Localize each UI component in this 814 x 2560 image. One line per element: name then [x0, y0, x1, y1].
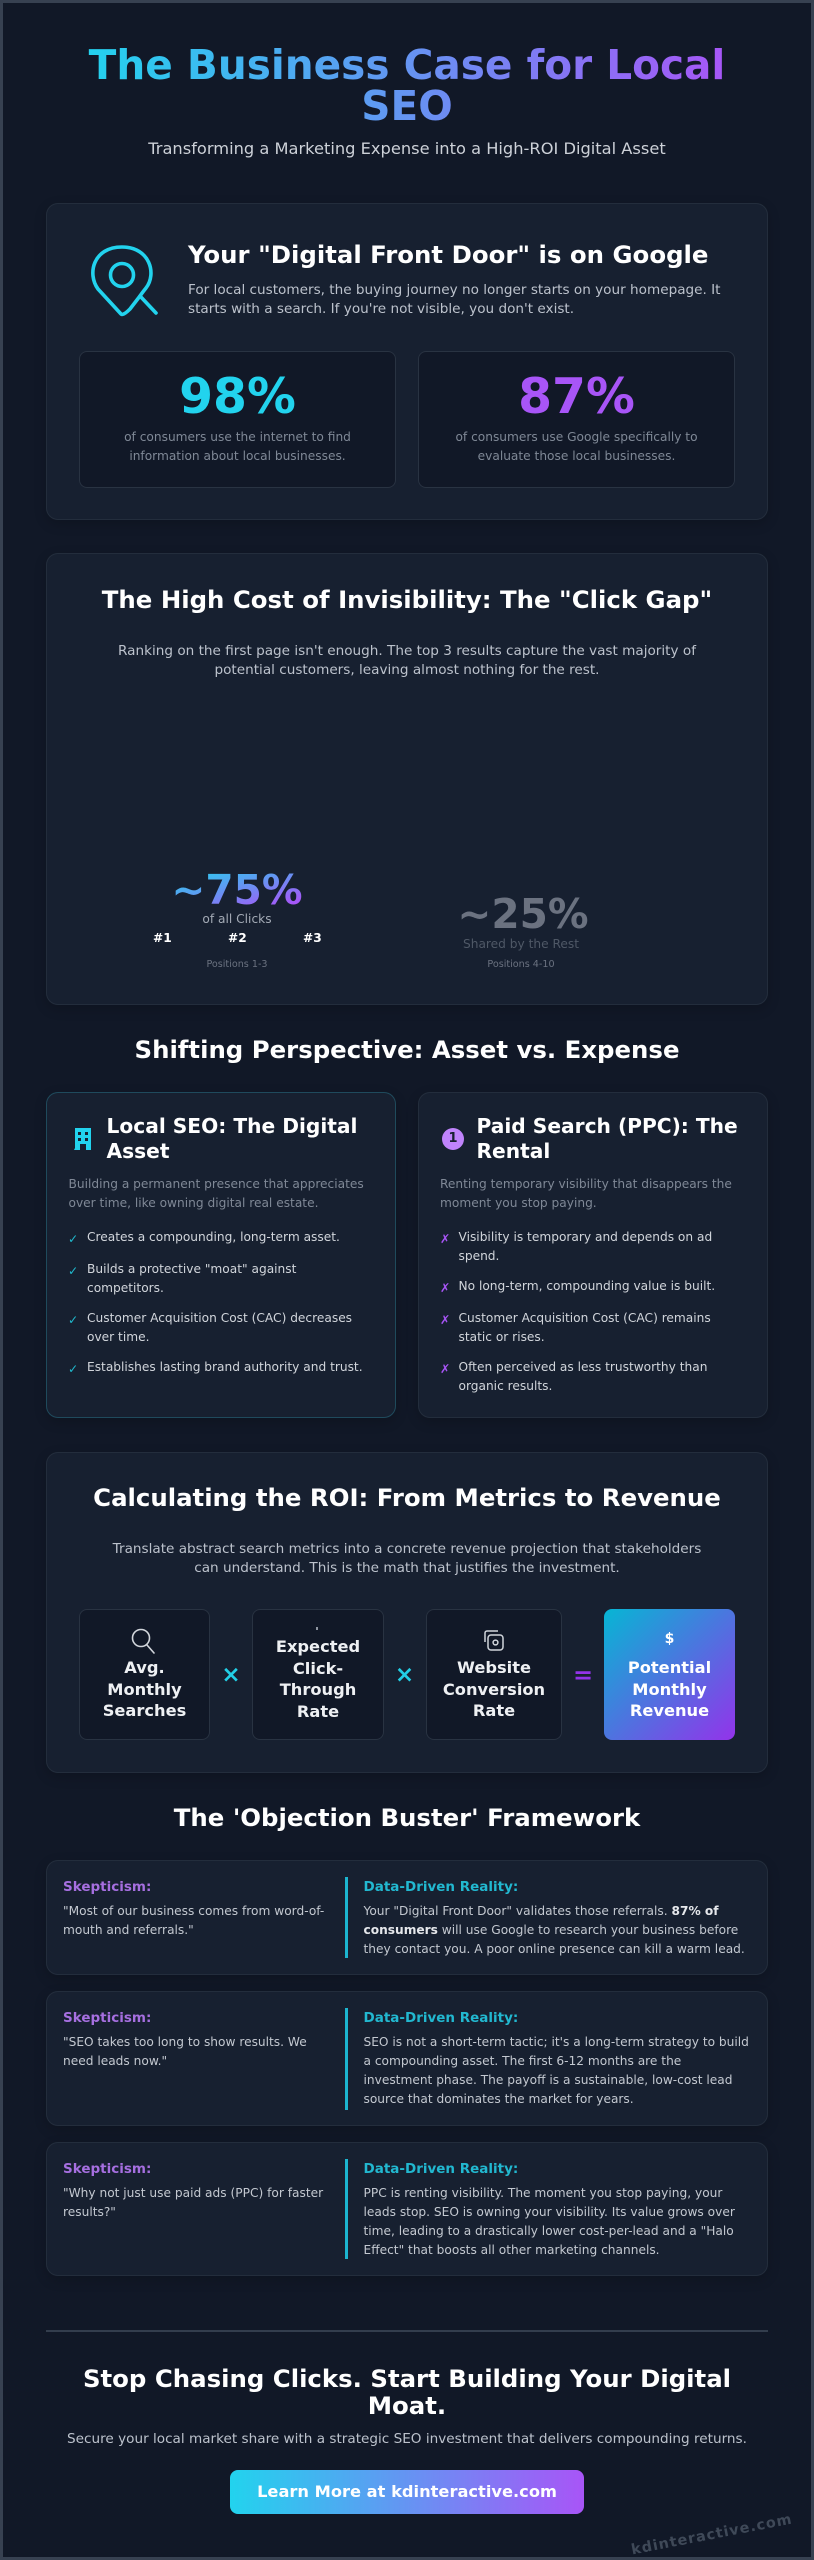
drawback 4: organic results. — [458, 1379, 552, 1393]
heading: objection buster: The 'Objection Buster' Framework — [174, 1803, 640, 1832]
stat number: 87% — [518, 368, 635, 425]
objection quote: "Most of our business comes from word-of- — [63, 1904, 324, 1918]
icon: dollar: $ — [665, 1631, 674, 1647]
drawback 3 — [440, 1311, 711, 1344]
intro text: Ranking on the first page isn't enough. The top 3 results capture the vast majority of — [118, 642, 696, 658]
reality label: Data-Driven Reality: — [364, 2161, 518, 2177]
icon: click mark — [316, 1627, 318, 1630]
reality text: PPC is renting visibility. The moment you stop paying, your — [364, 2186, 722, 2200]
drawback 1: spend. — [458, 1249, 499, 1263]
heading: asset vs expense: Shifting Perspective: Asset vs. Expense — [135, 1035, 679, 1064]
panel: local SEO — [46, 1092, 396, 1418]
operator: equals: = — [573, 1661, 593, 1689]
reality label: Data-Driven Reality: — [364, 1879, 518, 1895]
description — [68, 1176, 364, 1210]
objection quote — [63, 2034, 307, 2068]
benefit 3: Customer Acquisition Cost (CAC) decreases — [87, 1311, 352, 1325]
benefit 1: ✓ — [68, 1232, 78, 1246]
benefit 4: ✓ — [68, 1362, 78, 1376]
card heading: Local SEO: The Digital — [106, 1114, 357, 1138]
description — [440, 1176, 732, 1210]
call to action heading: Moat. — [368, 2390, 446, 2420]
objection quote: "Why not just use paid ads (PPC) for faster — [63, 2186, 323, 2200]
formula: revenue — [604, 1609, 735, 1740]
stat: 87% — [418, 351, 735, 488]
intro text: For local customers, the buying journey no longer starts on your homepage. It — [188, 282, 720, 298]
intro text: potential customers, leaving almost nothing for the rest. — [214, 662, 600, 678]
label: Website — [457, 1658, 531, 1677]
description: moment you stop paying. — [440, 1196, 597, 1210]
skepticism label: Skepticism: — [63, 2010, 151, 2026]
reality text: Your "Digital Front Door" validates those referrals. 87% of — [364, 1904, 719, 1918]
drawback 4: Often perceived as less trustworthy than — [458, 1360, 707, 1374]
skepticism label: Skepticism: — [63, 1879, 151, 1895]
button: Learn More at kdinteractive.com — [257, 2482, 557, 2501]
card heading — [476, 1114, 738, 1162]
panel: objection 1 — [46, 1860, 768, 1975]
benefit list — [68, 1230, 363, 1376]
card heading: Paid Search (PPC): The — [476, 1114, 738, 1138]
rank labels — [153, 931, 322, 945]
heading: The High Cost of Invisibility: The "Click Gap" — [102, 585, 712, 614]
benefit 3 — [68, 1311, 352, 1344]
label: Monthly — [107, 1680, 182, 1699]
call to action text: Secure your local market share with a strategic SEO investment that delivers compounding returns. — [67, 2430, 747, 2446]
description: over time, like owning digital real estate. — [68, 1196, 318, 1210]
drawback 3: static or rises. — [458, 1330, 545, 1344]
reality label: Data-Driven Reality: — [364, 2010, 518, 2026]
objection quote — [63, 1904, 324, 1936]
benefit 3: over time. — [87, 1330, 149, 1344]
rank labels: #1 — [153, 931, 172, 945]
reality text — [364, 1904, 745, 1956]
drawback 3: Customer Acquisition Cost (CAC) remains — [458, 1311, 711, 1325]
drawback 1: Visibility is temporary and depends on ad — [458, 1230, 712, 1244]
panel: objection 3 — [46, 2142, 768, 2276]
objection quote: "SEO takes too long to show results. We — [63, 2034, 307, 2048]
benefit 2: Builds a protective "moat" against — [87, 1262, 296, 1276]
rank labels: #3 — [303, 931, 322, 945]
intro text: Translate abstract search metrics into a concrete revenue projection that stakeholders — [113, 1540, 701, 1556]
icon: map pin with magnifier — [91, 245, 158, 316]
operator: times: × — [395, 1662, 414, 1688]
formula: click-through rate — [252, 1609, 384, 1740]
label — [443, 1658, 545, 1720]
title: The Business Case for Local — [89, 41, 725, 89]
intro text — [118, 642, 696, 678]
rank labels: #2 — [228, 931, 247, 945]
divider — [345, 2008, 348, 2110]
label: Revenue — [630, 1701, 709, 1720]
label: Rate — [473, 1701, 515, 1720]
button — [230, 2470, 584, 2514]
call to action heading: Stop Chasing Clicks. Start Building Your Digital — [83, 2364, 731, 2392]
drawback list — [440, 1230, 715, 1393]
intro text — [112, 1540, 701, 1576]
panel: ROI calculation — [46, 1452, 768, 1773]
reality text — [364, 2034, 749, 2106]
intro text: can understand. This is the math that justifies the investment. — [194, 1560, 620, 1576]
benefit 2: competitors. — [87, 1281, 164, 1295]
label — [276, 1637, 360, 1721]
drawback 1 — [440, 1230, 712, 1263]
skepticism label: Skepticism: — [63, 2161, 151, 2177]
title: SEO — [361, 82, 453, 130]
card heading: Asset — [106, 1138, 170, 1162]
share label: Shared by the Rest — [463, 937, 579, 951]
positions label: Positions 4-10 — [487, 959, 555, 970]
reality text: SEO is not a short-term tactic; it's a long-term strategy to build — [364, 2034, 749, 2048]
drawback 3: ✗ — [440, 1313, 450, 1327]
stat number: 98% — [179, 368, 296, 425]
description: Building a permanent presence that appreciates — [68, 1176, 364, 1190]
stat caption — [124, 430, 351, 462]
positions label: Positions 1-3 — [206, 959, 268, 970]
drawback 4 — [440, 1360, 707, 1393]
label: Monthly — [632, 1680, 707, 1699]
label: Searches — [103, 1701, 186, 1720]
benefit 1: Creates a compounding, long-term asset. — [87, 1230, 340, 1244]
reality text: they contact you. A poor online presence can kill a warm lead. — [364, 1942, 745, 1956]
stat caption: evaluate those local businesses. — [478, 448, 675, 462]
reality text: time, leading to a drastically lower cost-per-lead and a "Halo — [364, 2224, 734, 2238]
label: Rate — [297, 1702, 339, 1721]
description: Renting temporary visibility that disappears the — [440, 1176, 732, 1190]
divider — [345, 1877, 348, 1958]
card heading — [106, 1114, 357, 1162]
objection quote: mouth and referrals." — [63, 1922, 194, 1936]
benefit 2: ✓ — [68, 1264, 78, 1278]
label: Through — [280, 1680, 356, 1699]
benefit 2 — [68, 1262, 296, 1295]
intro text — [188, 282, 720, 316]
label — [628, 1658, 711, 1720]
label — [103, 1658, 186, 1720]
formula: conversion rate — [426, 1609, 562, 1740]
reality text — [364, 2186, 735, 2256]
label: Potential — [628, 1658, 711, 1677]
operator: times: × — [221, 1662, 241, 1688]
stat caption: of consumers use Google specifically to — [455, 430, 698, 444]
share label: of all Clicks — [202, 912, 272, 926]
divider — [345, 2159, 348, 2259]
icon: coin — [442, 1128, 464, 1150]
stat caption: information about local businesses. — [129, 448, 346, 462]
percent: ~75% — [171, 866, 303, 914]
benefit 3: ✓ — [68, 1313, 78, 1327]
icon: magnifier — [132, 1628, 155, 1654]
benefit 4: Establishes lasting brand authority and trust. — [87, 1360, 363, 1374]
objection quote: results?" — [63, 2204, 116, 2218]
reality text: Effect" that boosts all other marketing channels. — [364, 2242, 660, 2256]
heading: Calculating the ROI: From Metrics to Revenue — [93, 1483, 721, 1512]
objection quote: need leads now." — [63, 2054, 167, 2068]
call to action heading — [83, 2364, 731, 2420]
card heading: Rental — [476, 1138, 550, 1162]
stat: 98% — [79, 351, 396, 488]
reality text: source that dominates the market for years. — [364, 2092, 634, 2106]
reality text: consumers will use Google to research your business before — [364, 1922, 738, 1936]
panel: objection 2 — [46, 1991, 768, 2126]
heading: Your "Digital Front Door" is on Google — [188, 240, 708, 269]
label: Click- — [293, 1659, 343, 1678]
drawback 2: No long-term, compounding value is built. — [458, 1279, 715, 1293]
drawback 1: ✗ — [440, 1232, 450, 1246]
intro text: starts with a search. If you're not visible, you don't exist. — [188, 300, 574, 316]
reality text: investment phase. The payoff is a sustainable, low-cost lead — [364, 2072, 732, 2086]
icon: building — [74, 1128, 91, 1150]
stat caption: of consumers use the internet to find — [124, 430, 351, 444]
label: Avg. — [124, 1658, 165, 1677]
label: Conversion — [443, 1680, 545, 1699]
subtitle: Transforming a Marketing Expense into a High-ROI Digital Asset — [148, 139, 666, 158]
drawback 2: ✗ — [440, 1281, 450, 1295]
formula: searches — [79, 1609, 210, 1740]
panel: digital front door — [46, 203, 768, 520]
objection quote — [63, 2186, 324, 2218]
label: Expected — [276, 1637, 360, 1656]
panel: paid search — [418, 1092, 768, 1418]
panel: click gap — [46, 553, 768, 1005]
percent: ~25% — [457, 890, 589, 938]
stat: top three share — [153, 866, 322, 970]
icon: banknotes — [484, 1630, 504, 1651]
stat caption — [455, 430, 698, 462]
title — [0, 45, 814, 127]
reality text: a compounding asset. The first 6-12 months are the — [364, 2054, 681, 2068]
drawback 4: ✗ — [440, 1362, 450, 1376]
stat: remaining share — [457, 890, 589, 970]
watermark: kdinteractive.com — [630, 2512, 794, 2558]
reality text: leads stop. SEO is owning your visibility. Its value grows over — [364, 2204, 735, 2218]
icon: coin: 1 — [448, 1131, 458, 1146]
